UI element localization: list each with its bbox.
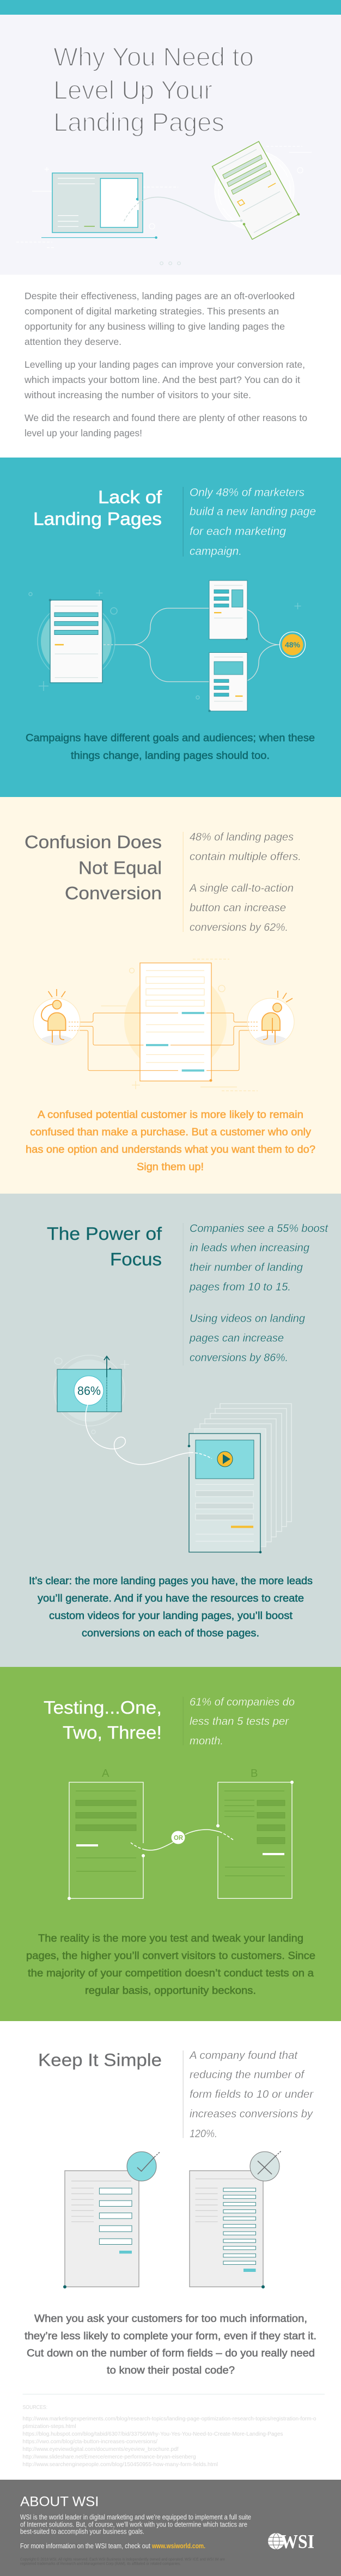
panel: intro text: opportunity for any business willing to give landing pages the — [25, 321, 285, 332]
divider — [183, 2050, 184, 2138]
heading: Conversion — [65, 883, 162, 903]
heading: Landing Pages — [33, 509, 162, 529]
statistics: A single call-to-action — [189, 882, 294, 894]
icon: check badge — [127, 2152, 160, 2181]
takeaway: confused than make a purchase. But a customer who only — [30, 1127, 312, 1138]
panel: intro text: level up your landing pages! — [25, 428, 142, 438]
statistic: Only 48% of marketers — [190, 486, 305, 499]
footer description — [20, 2513, 251, 2550]
statistics: conversions by 86%. — [190, 1352, 288, 1364]
icon: confused person left — [33, 989, 80, 1045]
takeaway: The reality is the more you test and tweak your landing — [38, 1933, 303, 1944]
sources heading: SOURCES: — [23, 2404, 47, 2411]
label A: A — [102, 1768, 109, 1780]
title: Why You Need to — [53, 43, 254, 72]
statistic — [189, 2050, 314, 2140]
title: Level Up Your — [53, 76, 212, 105]
takeaway: pages, the higher you’ll convert visitors to customers. Since — [26, 1950, 315, 1962]
illustration: 86% boost card — [54, 1355, 129, 1434]
takeaway: A confused potential customer is more likely to remain — [38, 1109, 303, 1121]
statistic: form fields to 10 or under — [190, 2089, 314, 2101]
copyright: Copyright © 2018 WSI. All rights reserved. Each WSI Business is independently owned and operated. WSI ICE and WSI IM are — [20, 2558, 225, 2562]
divider — [183, 487, 184, 557]
copyright: registered trademarks of Research and Management Corp (RAM), its affiliated or related companies. — [20, 2562, 181, 2566]
divider — [183, 1697, 184, 1745]
connector curve — [86, 1405, 212, 1465]
source links: http://www.searchenginepeople.com/blog/150450955-how-many-form-fields.html — [23, 2461, 218, 2468]
statistic: less than 5 tests per — [190, 1716, 289, 1728]
statistics: Companies see a 55% boost — [190, 1223, 328, 1235]
label B: B — [251, 1768, 258, 1780]
statistics: their number of landing — [190, 1262, 303, 1274]
statistic: month. — [190, 1735, 223, 1747]
heading: Confusion Does — [25, 832, 162, 852]
heading — [47, 1224, 162, 1269]
statistics: contain multiple offers. — [190, 851, 301, 863]
statistic: reducing the number of — [190, 2069, 305, 2081]
divider — [183, 832, 184, 932]
takeaway — [25, 2313, 316, 2376]
panel: hero header — [0, 0, 341, 275]
takeaway — [29, 1576, 313, 1639]
heading — [44, 1697, 162, 1743]
icon: play button — [217, 1451, 233, 1467]
heading: Keep It Simple — [38, 2050, 162, 2070]
statistic: A company found that — [189, 2050, 298, 2062]
top teal bar — [0, 0, 341, 15]
takeaway: to know their postal code? — [107, 2365, 235, 2376]
copyright — [20, 2558, 225, 2566]
panel: intro text: attention they deserve. — [25, 336, 121, 347]
footer description: WSI is the world leader in digital marketing and we’re equipped to implement a full suite — [20, 2513, 251, 2521]
badge: OR — [171, 1831, 185, 1844]
illustration: two confused customers wired through a page — [33, 959, 294, 1091]
takeaway: regular basis, opportunity beckons. — [85, 1985, 256, 1997]
illustration: long form rejected — [190, 2151, 282, 2288]
takeaway: Campaigns have different goals and audiences; when these — [26, 732, 315, 744]
takeaway — [26, 1109, 315, 1173]
statistic: for each marketing — [190, 526, 286, 538]
heading: Testing...One, — [44, 1697, 162, 1718]
panel: testing one two three — [0, 1667, 341, 2021]
title — [53, 43, 254, 137]
divider — [183, 1223, 184, 1366]
footer description: of Internet solutions. But, of course, we’ll work with you to determine which tactics are — [20, 2520, 247, 2528]
illustration: one page branches into two — [29, 580, 305, 712]
footer description: best-suited to accomplish your business goals. — [20, 2527, 144, 2535]
badge: OR: OR — [174, 1834, 183, 1842]
takeaway: you’ll generate. And if you have the resources to create — [38, 1593, 304, 1604]
statistic — [190, 1696, 295, 1747]
takeaway — [26, 732, 315, 762]
takeaway — [26, 1933, 315, 1997]
source links: https://vwo.com/blog/cta-button-increases-conversions/ — [23, 2438, 157, 2445]
heading — [25, 832, 162, 903]
takeaway: the majority of your competition doesn’t conduct tests on a — [28, 1968, 314, 1979]
illustration: desktop page linked to tilted landing page — [16, 141, 312, 248]
title: Landing Pages — [53, 108, 224, 137]
panel: intro text: Despite their effectiveness, landing pages are an oft-overlooked — [25, 291, 295, 301]
panel: sources — [23, 2394, 325, 2468]
panel: intro text: without increasing the number of visitors to your site. — [24, 390, 251, 400]
carousel dots — [160, 262, 180, 265]
source links: https://blog.hubspot.com/blog/tabid/6307/bid/33756/Why-You-Yes-You-Need-to-Create-More-Landing-Pages — [23, 2431, 283, 2437]
statistics: Using videos on landing — [190, 1313, 305, 1325]
heading: Focus — [110, 1249, 162, 1269]
statistics: pages can increase — [189, 1332, 284, 1344]
statistic: campaign. — [190, 545, 242, 558]
logo: WSI — [268, 2530, 314, 2552]
panel: intro text — [24, 291, 307, 438]
heading: Not Equal — [78, 857, 162, 878]
illustration: stack of landing pages with video — [188, 1404, 291, 1553]
takeaway: It’s clear: the more landing pages you have, the more leads — [29, 1576, 313, 1587]
statistics: in leads when increasing — [190, 1242, 309, 1254]
takeaway: Sign them up! — [137, 1162, 204, 1173]
takeaway: custom videos for your landing pages, you’ll boost — [49, 1610, 293, 1622]
illustration: A/B test pages — [68, 1768, 294, 1900]
illustration: 86% boost card: 86% — [77, 1384, 101, 1398]
panel: about WSI footer — [0, 2480, 341, 2576]
heading: Lack of — [98, 487, 162, 507]
panel: lack of landing pages — [0, 458, 341, 797]
panel: intro text: We did the research and found there are plenty of other reasons to — [25, 412, 307, 423]
footer description: www.wsiworld.com. — [151, 2542, 205, 2550]
takeaway: When you ask your customers for too much information, — [34, 2313, 307, 2325]
illustration: short form approved — [63, 2152, 160, 2288]
panel: the power of focus — [0, 1194, 341, 1667]
statistics — [189, 831, 301, 934]
heading: The Power of — [47, 1224, 162, 1244]
statistic — [190, 486, 316, 558]
takeaway: they’re less likely to complete your form, even if they start it. — [25, 2331, 316, 2342]
takeaway: conversions on each of those pages. — [82, 1628, 259, 1639]
statistics: pages from 10 to 15. — [189, 1281, 291, 1293]
statistics: conversions by 62%. — [190, 922, 288, 934]
badge: 48% — [280, 632, 305, 657]
icon: cross badge — [250, 2151, 282, 2181]
footer description: For more information on the WSI team, check out — [20, 2542, 150, 2550]
source links: http://www.slideshare.net/Emerce/emerce-performance-bryan-eisenberg — [23, 2454, 196, 2460]
footer heading: ABOUT WSI — [20, 2494, 99, 2510]
source links: ptimization-steps.html — [23, 2423, 76, 2430]
panel: confusion does not equal conversion — [0, 797, 341, 1194]
source links — [23, 2416, 316, 2468]
statistics: button can increase — [190, 902, 286, 914]
takeaway: things change, landing pages should too. — [71, 750, 270, 762]
panel: intro text: Levelling up your landing pages can improve your conversion rate, — [25, 359, 305, 370]
logo: WSI: WSI — [281, 2530, 314, 2552]
heading — [33, 487, 162, 529]
source links: http://www.marketingexperiments.com/blog/research-topics/landing-page-optimization-research-topics/registration-form-o — [23, 2416, 316, 2422]
panel: keep it simple — [25, 2050, 316, 2376]
statistic: 120%. — [190, 2128, 217, 2140]
panel: intro text: which impacts your bottom line. And the best part? You can do it — [24, 374, 300, 385]
source links: http://www.eyeviewdigital.com/documents/eyeview_brochure.pdf — [23, 2446, 179, 2453]
panel: intro text: component of digital marketing strategies. This presents an — [25, 306, 279, 317]
statistics: 48% of landing pages — [190, 831, 294, 843]
statistic: build a new landing page — [190, 505, 316, 518]
statistics — [189, 1223, 328, 1364]
takeaway: has one option and understands what you want them to do? — [26, 1144, 315, 1156]
heading: Two, Three! — [63, 1722, 162, 1743]
icon: confused person right — [247, 991, 294, 1045]
takeaway: Cut down on the number of form fields – do you really need — [27, 2348, 315, 2359]
statistic: 61% of companies do — [190, 1696, 295, 1708]
badge: 48%: 48% — [285, 640, 301, 649]
statistic: increases conversions by — [190, 2108, 313, 2120]
